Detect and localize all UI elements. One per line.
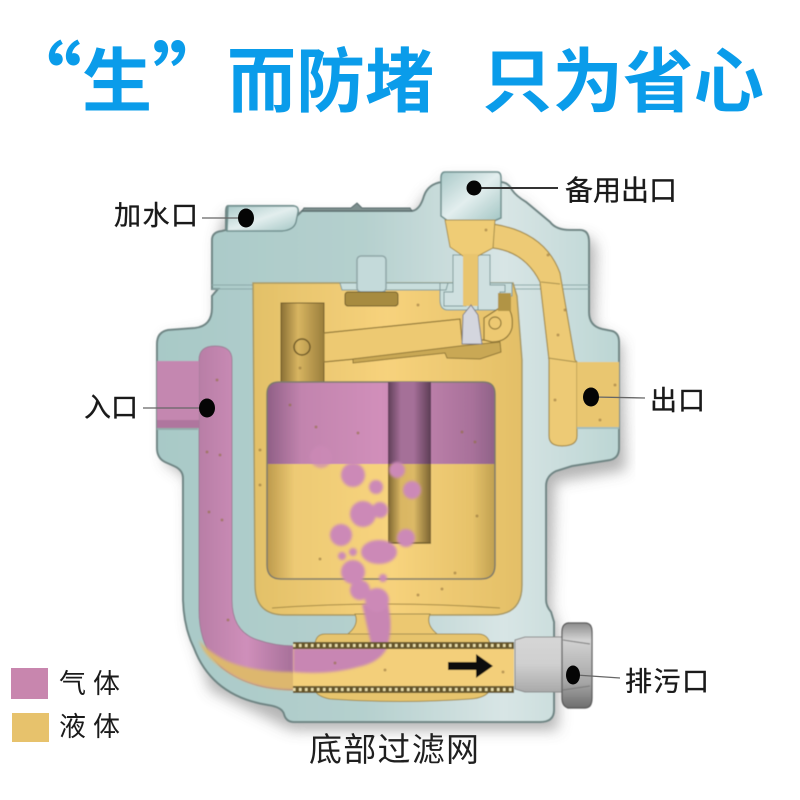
- backup outlet pipe: [493, 224, 577, 446]
- cover seam: [212, 285, 589, 289]
- pipe seams: [541, 282, 576, 362]
- label: backup outlet: 备用出口: [565, 175, 677, 206]
- label: bottom filter: 底部过滤网: [309, 731, 479, 768]
- label: outlet: 出口: [650, 386, 705, 416]
- grey seat under cover: [340, 283, 512, 310]
- filter mesh top: [293, 642, 514, 649]
- inner chamber liquid: [253, 283, 522, 615]
- valve head: [445, 220, 495, 256]
- legend: gas: [11, 668, 120, 699]
- legend: gas: 体: [93, 669, 120, 699]
- specks: [206, 228, 616, 674]
- label: backup outlet: [466, 175, 677, 206]
- legend: gas: 气: [59, 669, 86, 699]
- filter housing: [315, 634, 490, 702]
- label: inlet: [84, 393, 215, 423]
- label: inlet: 入口: [84, 393, 138, 423]
- title: 只为省心: [482, 43, 764, 121]
- valve body casing: [157, 182, 619, 722]
- flow arrow: [448, 654, 493, 678]
- body shadow: [165, 180, 626, 730]
- filter interior: [293, 648, 514, 686]
- legend: liquid: [12, 712, 120, 742]
- drain plug: [515, 637, 563, 692]
- label: outlet: [583, 386, 705, 416]
- title: “: [0, 16, 82, 137]
- backup outlet boss: [441, 172, 501, 221]
- label: fill port: 加水口: [114, 201, 198, 231]
- gas plume in filter: [293, 604, 391, 673]
- gas bubbles: [310, 446, 421, 612]
- title: [0, 16, 764, 137]
- title: ”: [152, 16, 236, 137]
- filter mesh bottom: [293, 686, 514, 693]
- cover top disc: [302, 203, 412, 211]
- rod pin: [294, 339, 310, 355]
- hex nut: [562, 623, 592, 708]
- legend: liquid: 液: [59, 712, 86, 742]
- float rod: [281, 303, 324, 382]
- screw nut: [345, 292, 398, 306]
- outlet yellow: [577, 362, 619, 428]
- label: drain: [566, 666, 709, 697]
- fill port boss: [227, 206, 298, 231]
- tube end: [388, 542, 431, 544]
- chamber bottom line: [272, 604, 500, 608]
- valve diagram: [157, 172, 626, 730]
- float bucket gas: [267, 382, 495, 464]
- valve housing: [444, 255, 505, 310]
- title: 生: [82, 43, 152, 121]
- inlet opening: [157, 361, 199, 428]
- tube liquid: [388, 464, 431, 543]
- valve stem: [463, 254, 478, 306]
- inlet pipe: [199, 346, 295, 690]
- screw: [357, 256, 386, 292]
- neck: [345, 614, 440, 636]
- lever arm: [324, 293, 512, 363]
- tube gas: [388, 382, 431, 464]
- label: fill port: [114, 201, 254, 231]
- legend: liquid: 体: [93, 712, 120, 742]
- label: drain: 排污口: [625, 667, 709, 697]
- bucket outline: [267, 382, 495, 579]
- inlet pipe liquid underside: [199, 640, 295, 690]
- valve needle: [462, 305, 482, 344]
- title: 而防堵: [227, 43, 434, 121]
- float bucket liquid: [267, 464, 495, 579]
